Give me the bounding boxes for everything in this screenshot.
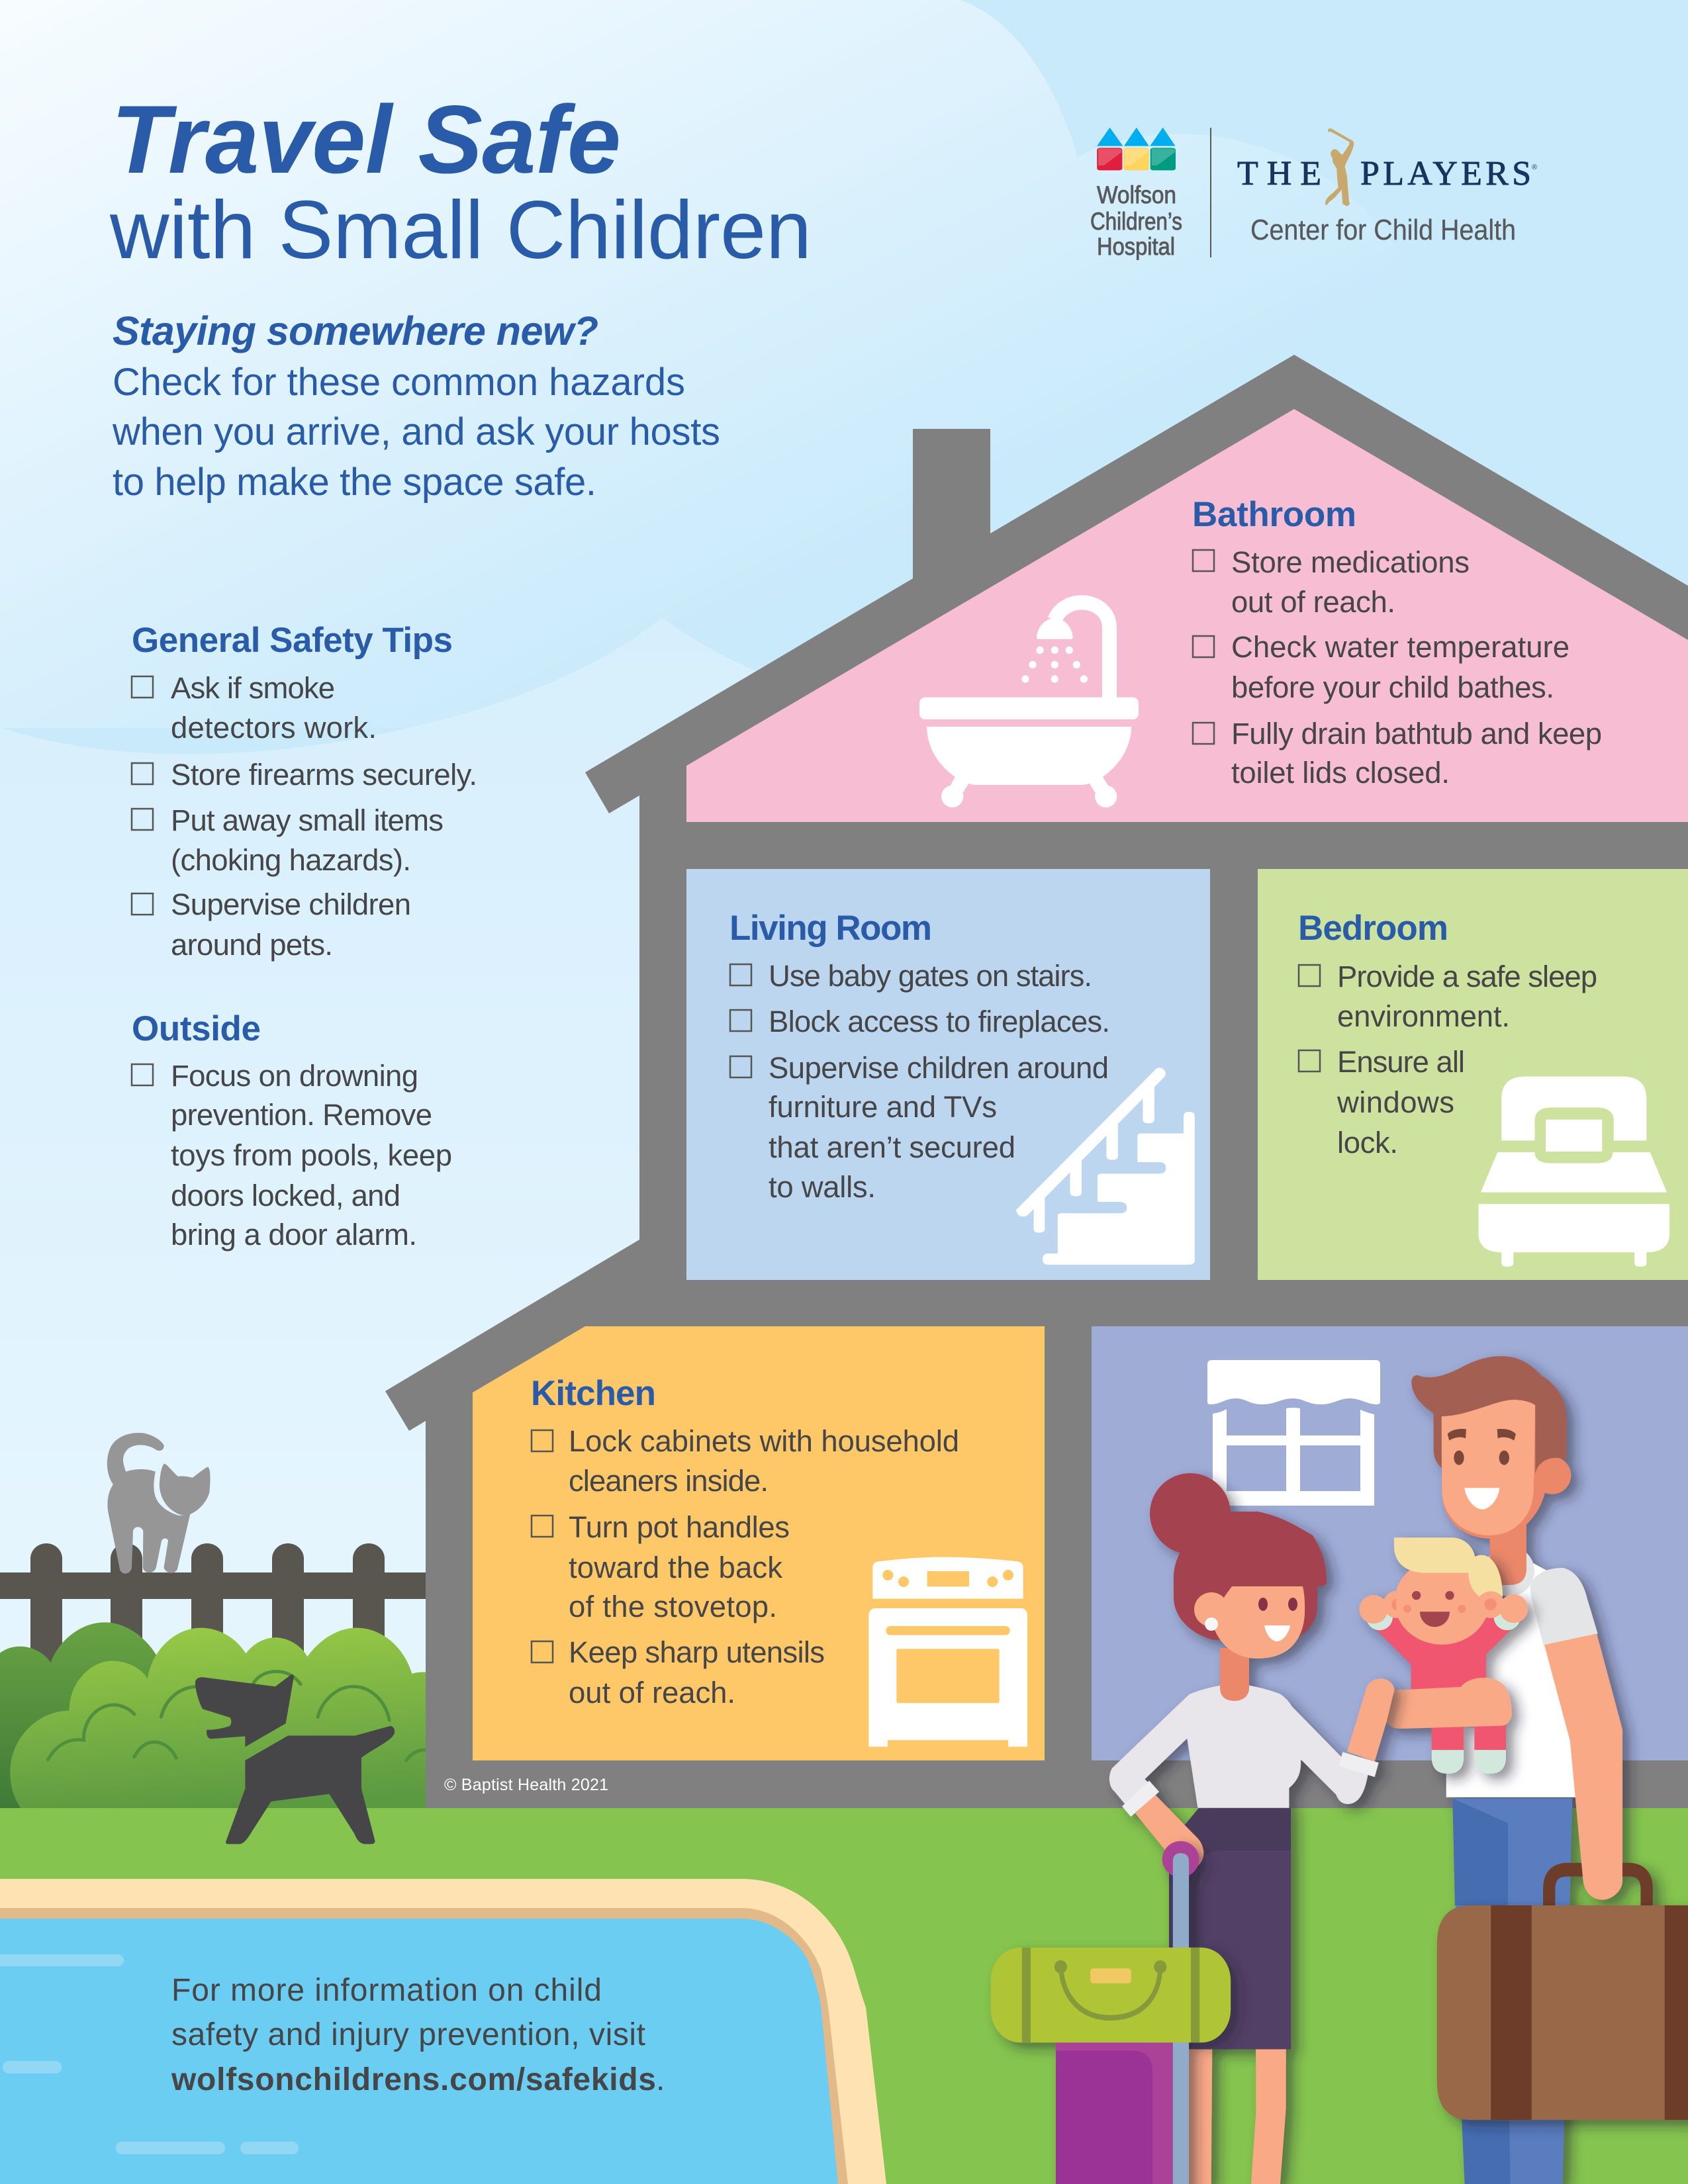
panel: family room	[1092, 1326, 1688, 1760]
logo: Wolfson Children's Hospital: Children’s	[1090, 208, 1182, 235]
checklist: kitchen: out of reach.	[569, 1676, 735, 1709]
logo: Wolfson Children's Hospital: Wolfson	[1097, 181, 1176, 208]
heading: living room: Living Room	[729, 909, 932, 948]
woman	[1109, 1473, 1395, 2184]
checklist: kitchen: Turn pot handles	[569, 1510, 790, 1544]
icon: bed	[1478, 1077, 1669, 1267]
green duffel bag	[991, 1948, 1231, 2042]
more information text: For more information on child	[171, 1973, 602, 2008]
brown suitcase	[1437, 1905, 1688, 2120]
checklist: general safety tips: around pets.	[171, 928, 333, 962]
checklist: general safety tips: detectors work.	[171, 711, 377, 745]
checklist: general safety tips: Ask if smoke	[171, 671, 335, 705]
woman: head	[1150, 1473, 1327, 1701]
checklist: general safety tips: Put away small items	[171, 803, 444, 837]
heading: outside: Outside	[132, 1009, 261, 1048]
checklist: living room: Block access to fireplaces.	[769, 1005, 1110, 1038]
copyright: © Baptist Health 2021	[444, 1776, 608, 1794]
title	[109, 85, 812, 276]
panel: general safety tips	[132, 621, 477, 962]
fence	[0, 1543, 426, 1721]
heading: general safety tips: General Safety Tips	[132, 621, 453, 660]
dog	[195, 1674, 395, 1844]
checklist: bathroom: Store medications	[1231, 545, 1470, 579]
checklist: living room: that aren’t secured	[769, 1130, 1015, 1164]
icon: bathtub	[919, 602, 1139, 807]
icon: stairs	[1016, 1068, 1195, 1265]
heading: kitchen: Kitchen	[531, 1374, 656, 1413]
panel: bedroom	[1258, 869, 1688, 1280]
checklist: living room: to walls.	[769, 1170, 876, 1204]
checklist: general safety tips	[132, 671, 477, 962]
intro text: to help make the space safe.	[113, 461, 596, 504]
icon: window	[1207, 1360, 1380, 1506]
house structure	[385, 355, 1688, 1808]
logo: The Players Center for Child Health	[1237, 128, 1537, 246]
checklist: living room: Supervise children around	[769, 1051, 1109, 1085]
more information text: wolfsonchildrens.com/safekids	[171, 2062, 656, 2097]
checklist: outside	[132, 1059, 452, 1251]
checklist: bedroom: lock.	[1337, 1126, 1398, 1160]
checklist: bathroom: before your child bathes.	[1231, 670, 1554, 704]
checklist: bedroom	[1299, 960, 1597, 1160]
intro text	[112, 308, 720, 504]
checklist: living room: furniture and TVs	[769, 1090, 997, 1124]
bushes	[0, 1622, 426, 1809]
panel: living room	[686, 869, 1210, 1280]
icon: stove	[868, 1557, 1027, 1747]
logo: The Players Center for Child Health: THE	[1237, 155, 1321, 193]
intro text: when you arrive, and ask your hosts	[112, 410, 720, 453]
checklist: general safety tips: Store firearms securely.	[171, 758, 477, 792]
checklist: kitchen: of the stovetop.	[569, 1590, 777, 1623]
title: Travel Safe	[111, 85, 621, 193]
logo: Wolfson Children's Hospital	[1090, 128, 1182, 260]
cat on fence	[107, 1433, 211, 1574]
checklist: living room	[730, 959, 1110, 1204]
checklist: general safety tips: Supervise children	[171, 887, 411, 921]
checklist: kitchen	[532, 1424, 959, 1709]
heading: bathroom: Bathroom	[1192, 495, 1356, 534]
checklist: bathroom: Check water temperature	[1231, 630, 1570, 664]
checklist: outside: prevention. Remove	[171, 1098, 432, 1132]
checklist: outside: Focus on drowning	[171, 1059, 418, 1093]
checklist: outside: doors locked, and	[171, 1179, 400, 1212]
checklist: bedroom: windows	[1336, 1085, 1454, 1119]
logo: Wolfson Children's Hospital: Hospital	[1097, 233, 1175, 260]
checklist: general safety tips: (choking hazards).	[171, 843, 411, 877]
pool	[0, 1879, 886, 2184]
luggage	[991, 1841, 1688, 2184]
woman: top and arms	[1109, 1678, 1395, 1868]
checklist: bathroom: out of reach.	[1231, 585, 1395, 619]
checklist: bathroom: Fully drain bathtub and keep	[1231, 717, 1602, 751]
panel: outside	[132, 1009, 452, 1251]
logo: The Players Center for Child Health: PLAYERS	[1360, 155, 1531, 193]
checklist: kitchen: cleaners inside.	[569, 1464, 769, 1498]
checklist: kitchen: Keep sharp utensils	[569, 1635, 825, 1669]
title: with Small Children	[109, 185, 812, 276]
checklist: living room: Use baby gates on stairs.	[769, 959, 1092, 993]
logo: The Players Center for Child Health: Center for Child Health	[1250, 214, 1516, 246]
checklist: bathroom: toilet lids closed.	[1231, 756, 1450, 790]
purple rolling suitcase	[1056, 1841, 1199, 2184]
baby	[1359, 1537, 1528, 1774]
intro text: Check for these common hazards	[113, 361, 685, 404]
intro text: Staying somewhere new?	[113, 308, 598, 353]
heading: bedroom: Bedroom	[1298, 909, 1448, 948]
checklist: bedroom: Ensure all	[1337, 1045, 1465, 1079]
grass	[0, 1808, 1688, 2184]
more information text: safety and injury prevention, visit	[171, 2017, 645, 2052]
panel: kitchen	[473, 1326, 1045, 1760]
checklist: kitchen: Lock cabinets with household	[569, 1424, 959, 1458]
checklist: kitchen: toward the back	[569, 1551, 782, 1584]
more information text	[171, 1973, 665, 2097]
panel: bathroom	[686, 409, 1688, 822]
checklist: bedroom: environment.	[1337, 999, 1510, 1033]
checklist: outside: bring a door alarm.	[171, 1218, 417, 1251]
man	[1411, 1356, 1647, 2184]
checklist: outside: toys from pools, keep	[171, 1138, 452, 1172]
more information text: .	[656, 2062, 665, 2097]
checklist: bathroom	[1193, 545, 1602, 790]
logo divider	[1210, 128, 1211, 257]
checklist: bedroom: Provide a safe sleep	[1337, 960, 1597, 993]
logo: The Players Center for Child Health: ®	[1532, 163, 1537, 171]
water ripples	[0, 1954, 299, 2154]
